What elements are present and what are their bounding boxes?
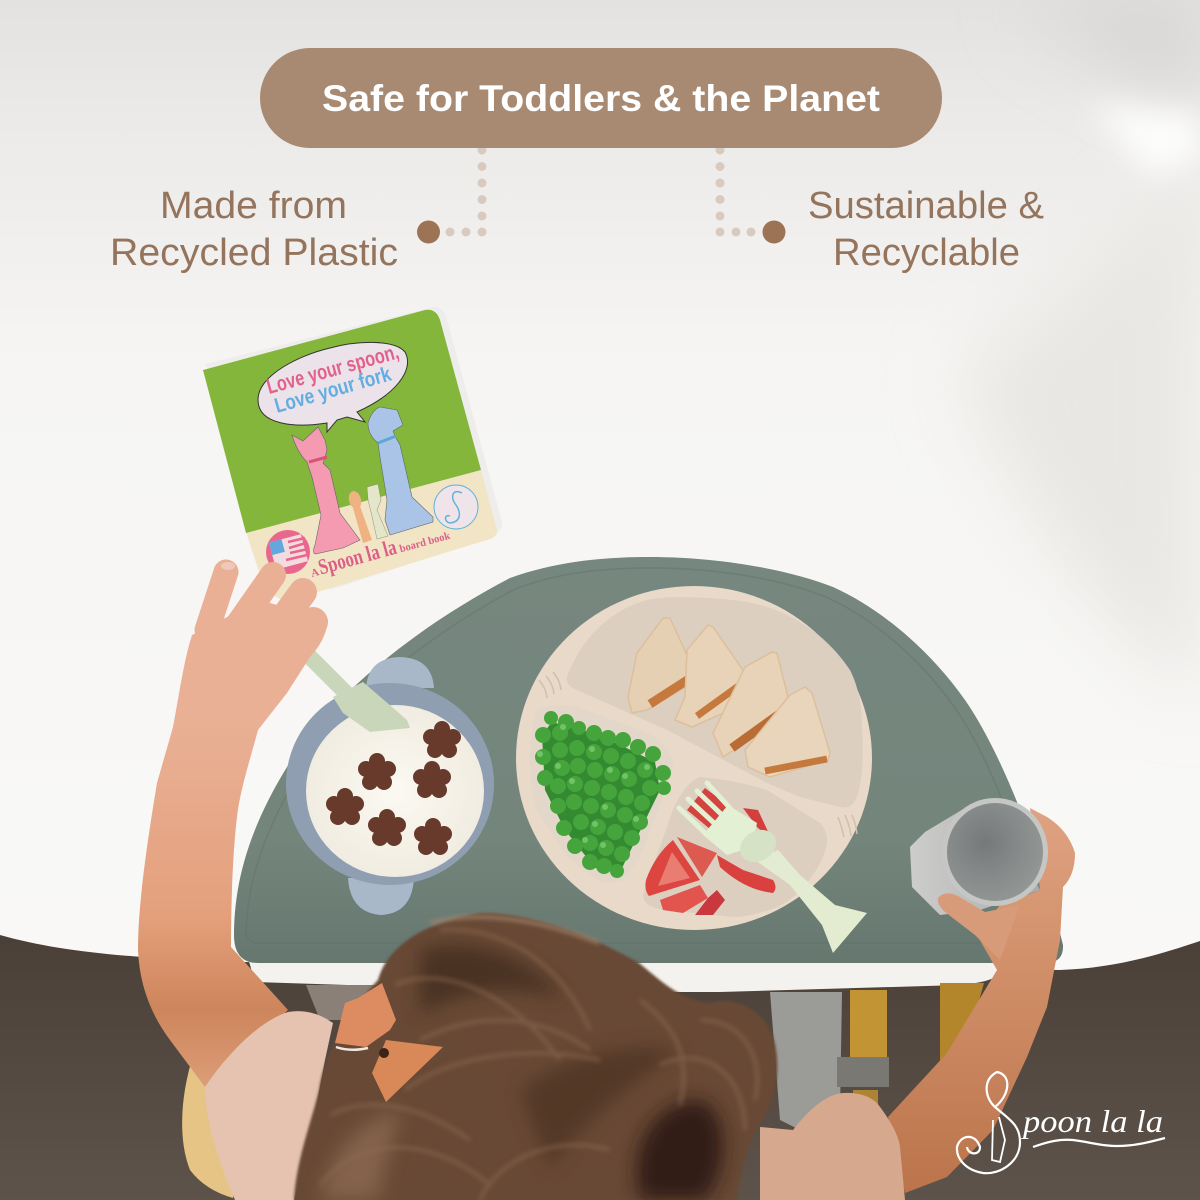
board book — [203, 307, 502, 602]
logo: spoon la la — [957, 1072, 1165, 1173]
hair bow — [335, 983, 443, 1102]
plate body — [516, 586, 872, 930]
speech bubble — [258, 341, 408, 432]
book title text: A — [310, 566, 321, 580]
label: made from recycled plastic: Recycled Plastic — [110, 232, 398, 274]
speech bubble: Love your spoon, — [264, 341, 401, 399]
child hair — [294, 913, 777, 1200]
table front edge — [248, 958, 1000, 992]
chair and table legs — [182, 983, 984, 1198]
title pill — [260, 48, 942, 148]
spoon and fork characters — [347, 484, 388, 543]
cup — [910, 798, 1048, 915]
dog — [368, 407, 433, 535]
bowl rim — [286, 683, 494, 885]
peas — [535, 711, 671, 878]
label: sustainable and recyclable — [808, 185, 1044, 274]
book cover cream — [246, 470, 497, 602]
s monogram badge — [434, 485, 478, 529]
label: made from recycled plastic — [110, 185, 398, 274]
thumb — [938, 893, 1020, 960]
title connector right — [716, 146, 786, 244]
label: sustainable and recyclable: Recyclable — [833, 232, 1020, 274]
strawberries — [645, 788, 776, 915]
child left arm and hand — [138, 562, 328, 1087]
book title text: board book — [398, 530, 452, 555]
label: made from recycled plastic: Made from — [160, 185, 347, 227]
book title text — [307, 519, 453, 582]
floor — [0, 935, 1200, 1200]
book pages edge — [205, 307, 502, 590]
child dress — [205, 1011, 905, 1200]
book cover green — [203, 310, 481, 533]
cereal flowers — [326, 721, 461, 855]
logo: spoon la la: poon la la — [1021, 1103, 1163, 1139]
title pill: Safe for Toddlers & the Planet — [322, 78, 880, 119]
spoon — [310, 657, 410, 732]
cat — [292, 427, 360, 554]
sandwiches — [628, 618, 830, 777]
plate with sandwiches, peas, strawberries and fork — [516, 586, 872, 953]
book title text: Spoon la la — [315, 534, 399, 579]
bowl handles — [366, 657, 434, 688]
child right arm and hand — [888, 808, 1075, 1193]
flag badge — [266, 530, 310, 574]
speech bubble: Love your fork — [272, 363, 394, 418]
title connector left — [417, 146, 486, 244]
fork — [679, 783, 867, 953]
placemat — [234, 557, 1063, 963]
bowl with yogurt and cereal — [286, 657, 494, 915]
label: sustainable and recyclable: Sustainable & — [808, 185, 1044, 227]
